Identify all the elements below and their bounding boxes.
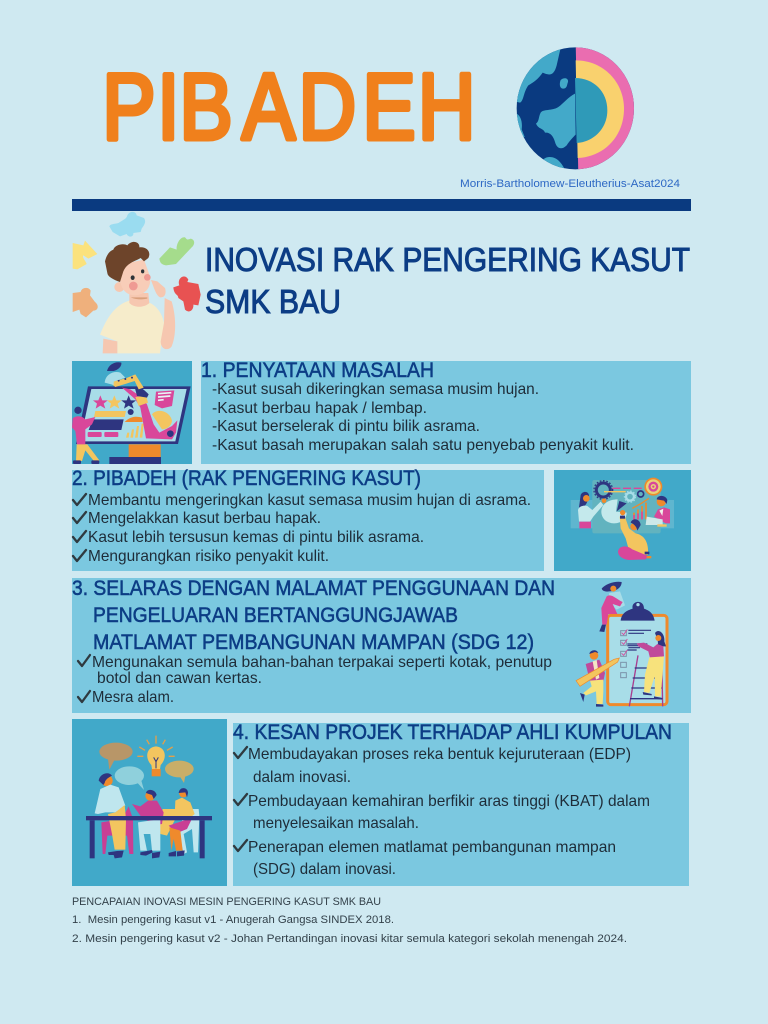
impact list: (SDG) dalam inovasi.	[253, 861, 396, 878]
action list: Mesra alam.	[92, 689, 174, 706]
achievements footer: 2. Mesin pengering kasut v2 - Johan Pertandingan inovasi kitar semula kategori sekolah menengah 2024.	[72, 933, 627, 945]
action list	[78, 654, 552, 706]
heading 4: 4. KESAN PROJEK TERHADAP AHLI KUMPULAN	[233, 721, 672, 744]
illustration: clipboard team	[576, 582, 667, 707]
impact list: menyelesaikan masalah.	[253, 815, 419, 832]
panel: 1 image	[72, 361, 192, 464]
panel: 4 image discussion	[72, 719, 227, 886]
benefit list: Mengurangkan risiko penyakit kulit.	[88, 548, 329, 565]
achievements footer: PENCAPAIAN INOVASI MESIN PENGERING KASUT SMK BAU	[72, 896, 381, 908]
heading 3: 3. SELARAS DENGAN MALAMAT PENGGUNAAN DAN	[72, 577, 555, 600]
panel: 3 selaras sdg	[72, 577, 691, 713]
benefit list: Kasut lebih tersusun kemas di pintu bilik asrama.	[88, 529, 424, 546]
problem list: -Kasut berselerak di pintu bilik asrama.	[212, 418, 480, 435]
heading 3	[72, 577, 555, 654]
illustration: thinking boy with puzzle pieces	[73, 212, 201, 353]
impact list: Pembudayaan kemahiran berfikir aras tinggi (KBAT) dalam	[248, 793, 650, 810]
icon: globe cross-section	[516, 47, 634, 170]
heading 3: PENGELUARAN BERTANGGUNGJAWAB	[93, 604, 458, 627]
problem list: -Kasut basah merupakan salah satu penyebab penyakit kulit.	[212, 437, 634, 454]
panel: 2 pibadeh	[72, 467, 544, 571]
navy divider bar	[72, 199, 691, 211]
achievements footer: 1. Mesin pengering kasut v1 - Anugerah Gangsa SINDEX 2018.	[72, 914, 394, 926]
heading 1: 1. PENYATAAN MASALAH	[201, 359, 434, 382]
problem list: -Kasut susah dikeringkan semasa musim hujan.	[212, 381, 539, 398]
impact list: Membudayakan proses reka bentuk kejuruteraan (EDP)	[248, 746, 631, 763]
impact list: Penerapan elemen matlamat pembangunan mampan	[248, 839, 616, 856]
main heading: INOVASI RAK PENGERING KASUT	[205, 241, 690, 278]
benefit list: Mengelakkan kasut berbau hapak.	[88, 510, 321, 527]
panel: 1 penyataan masalah	[201, 359, 691, 464]
impact list	[234, 746, 650, 878]
benefit list: Membantu mengeringkan kasut semasa musim hujan di asrama.	[88, 492, 531, 509]
panel: 2 image teamwork	[554, 470, 691, 571]
action list: botol dan cawan kertas.	[97, 670, 262, 687]
heading 2: 2. PIBADEH (RAK PENGERING KASUT)	[72, 467, 421, 490]
achievements footer	[72, 896, 627, 945]
benefit list	[73, 492, 531, 565]
heading 3: MATLAMAT PEMBANGUNAN MAMPAN (SDG 12)	[93, 631, 534, 654]
action list: Mengunakan semula bahan-bahan terpakai seperti kotak, penutup	[92, 654, 552, 671]
main heading	[205, 241, 690, 320]
title: PIBADEH	[102, 55, 476, 159]
problem list	[212, 381, 634, 454]
impact list: dalam inovasi.	[253, 769, 351, 786]
problem list: -Kasut berbau hapak / lembap.	[212, 400, 427, 417]
subtitle credit: Morris-Bartholomew-Eleutherius-Asat2024	[460, 178, 680, 190]
panel: 4 kesan projek	[233, 721, 689, 886]
main heading: SMK BAU	[205, 283, 341, 320]
